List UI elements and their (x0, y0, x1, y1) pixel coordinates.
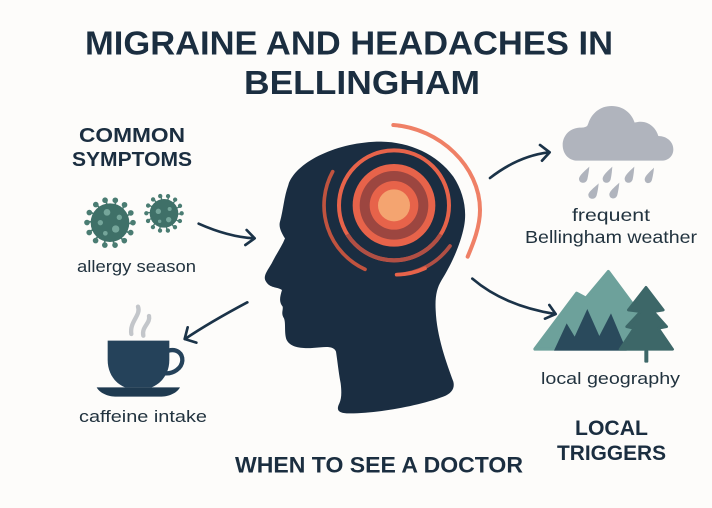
cloud (563, 106, 673, 161)
icon: head silhouette with migraine rings (265, 125, 480, 413)
cup handle (165, 350, 182, 373)
title: MIGRAINE AND HEADACHES IN (85, 26, 613, 62)
pain arc: left (324, 172, 365, 269)
heading: local triggers (557, 417, 666, 465)
label: frequent Bellingham weather: frequent (572, 205, 650, 225)
back mountains (535, 272, 647, 349)
label: frequent Bellingham weather: Bellingham weather (525, 227, 697, 247)
steam (131, 307, 149, 336)
icon: rain cloud (563, 106, 673, 199)
heading: common symptoms: SYMPTOMS (72, 148, 192, 171)
pain rings (339, 150, 449, 260)
label: caffeine intake: caffeine intake (79, 407, 207, 426)
raindrops (579, 167, 654, 199)
icon: coffee cup (97, 307, 182, 397)
arrow: allergy to head (199, 224, 255, 245)
label: local geography: local geography (541, 369, 681, 388)
large virus (87, 200, 133, 246)
arrow: head to geography (472, 279, 556, 319)
front peaks (554, 309, 627, 351)
title: BELLINGHAM (244, 65, 480, 102)
title (85, 26, 613, 102)
small virus (146, 196, 182, 231)
saucer (97, 387, 180, 397)
icon: mountains and tree (535, 272, 673, 363)
heading: when to see a doctor: WHEN TO SEE A DOCTOR (235, 452, 523, 478)
pain arc: outer (393, 125, 480, 257)
icon: allergy viruses (87, 196, 182, 246)
label: allergy season: allergy season (77, 257, 196, 276)
heading: local triggers: TRIGGERS (557, 442, 666, 465)
pain arc: lower right (397, 246, 450, 275)
head silhouette (265, 142, 465, 413)
pine tree (620, 287, 673, 349)
label: frequent Bellingham weather (525, 205, 697, 247)
arrow: head to caffeine (185, 302, 247, 343)
heading: common symptoms: COMMON (79, 124, 185, 147)
arrow: head to weather (490, 145, 550, 178)
heading: common symptoms (72, 124, 192, 171)
heading: local triggers: LOCAL (575, 417, 648, 440)
cup body (108, 341, 169, 387)
tree trunk (644, 350, 648, 363)
